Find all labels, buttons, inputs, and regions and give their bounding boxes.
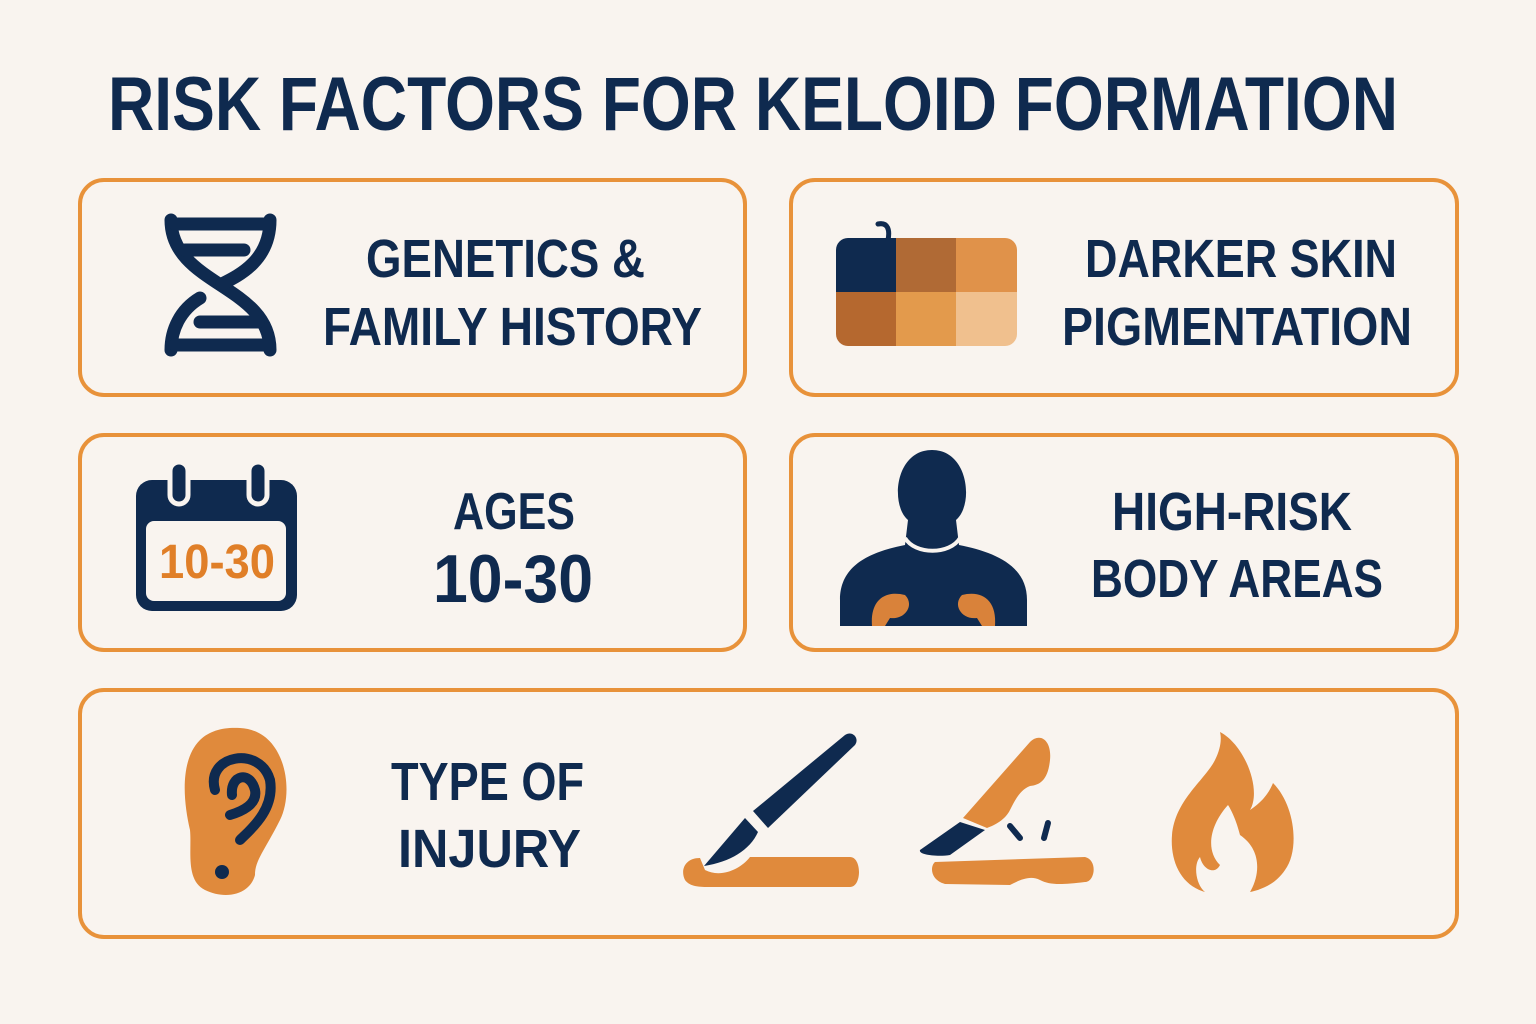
icon: dna (171, 220, 270, 350)
icon: scalpel cut (683, 733, 859, 887)
text: genetics: FAMILY HISTORY (323, 297, 702, 357)
panel: ages (80, 435, 745, 650)
text: injury: INJURY (398, 819, 581, 879)
text: genetics: GENETICS & (366, 229, 645, 289)
text: injury: TYPE OF (391, 752, 584, 812)
text: body areas: HIGH-RISK (1112, 482, 1352, 542)
text: injury (391, 752, 584, 879)
text: ages: 10-30 (433, 541, 593, 617)
text: body areas: BODY AREAS (1091, 549, 1383, 609)
icon: scalpel wound (920, 738, 1094, 885)
text: ages (433, 483, 593, 617)
text: body areas (1091, 482, 1383, 609)
icon: person (840, 450, 1027, 626)
panel: body areas (791, 435, 1457, 650)
text: skin: PIGMENTATION (1062, 297, 1412, 357)
text: ages: AGES (453, 483, 575, 541)
panel: genetics (80, 180, 745, 395)
panel: skin (791, 180, 1457, 395)
icon: ear (185, 728, 287, 895)
text: genetics (323, 229, 702, 357)
text: skin (1062, 229, 1412, 357)
text: skin: DARKER SKIN (1085, 229, 1397, 289)
panel: injury (80, 690, 1457, 937)
icon: calendar: 10-30 (159, 536, 275, 589)
icon: flame (1172, 732, 1294, 892)
icon: calendar (136, 462, 297, 611)
icon: skin palette (836, 224, 1017, 346)
